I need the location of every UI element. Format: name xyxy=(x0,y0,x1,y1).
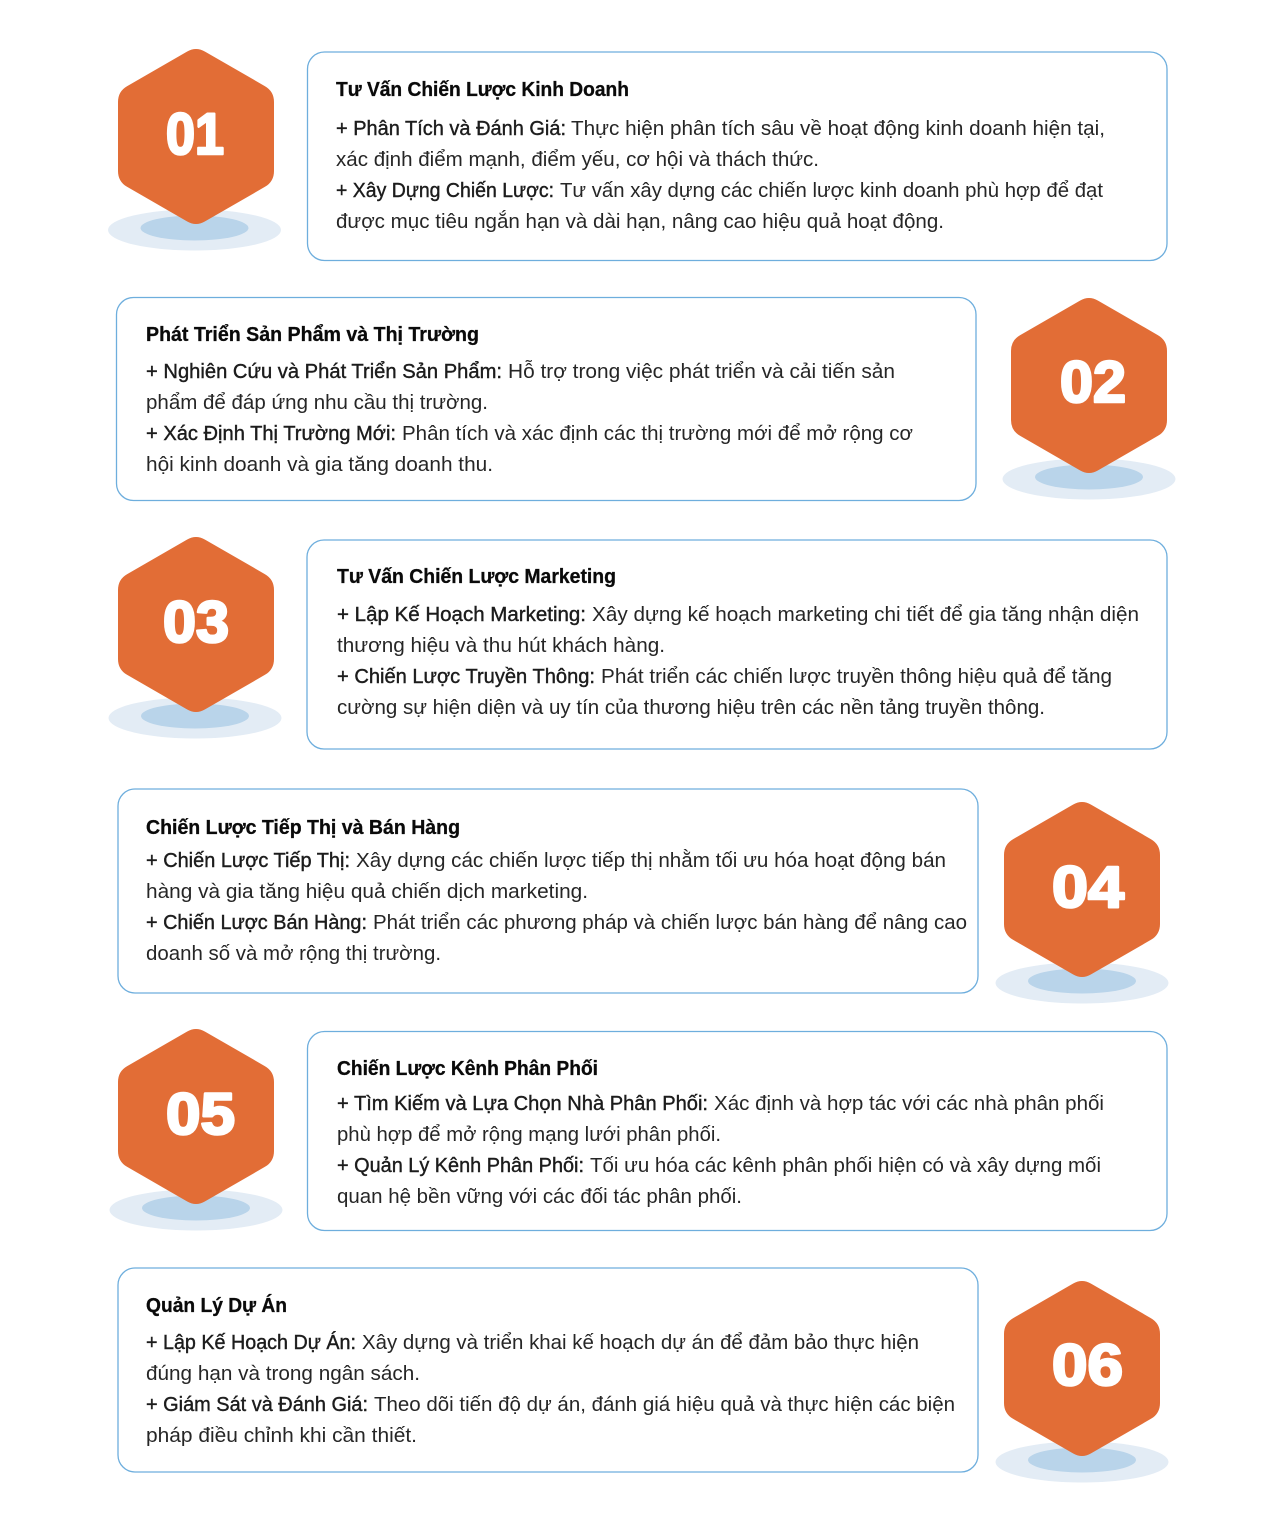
card: Chiến Lược Kênh Phân Phối: quan hệ bền vững với các đối tác phân phối. xyxy=(337,1185,742,1208)
panel: step 06 xyxy=(118,1268,1168,1482)
icon: hexagon badge 05: 05 xyxy=(166,1082,235,1147)
card: Chiến Lược Tiếp Thị và Bán Hàng: Chiến Lược Tiếp Thị và Bán Hàng xyxy=(146,817,460,839)
card: Phát Triển Sản Phẩm và Thị Trường: Phát Triển Sản Phẩm và Thị Trường xyxy=(146,324,479,346)
panel: step 03 xyxy=(108,537,1167,749)
panel: step 02 xyxy=(116,298,1176,500)
card: Quản Lý Dự Án: pháp điều chỉnh khi cần thiết. xyxy=(146,1424,417,1447)
icon: hexagon badge 03 xyxy=(108,537,282,738)
card: Chiến Lược Kênh Phân Phối: + Quản Lý Kênh Phân Phối: xyxy=(337,1154,584,1177)
icon: hexagon badge 04: 04 xyxy=(1052,855,1124,920)
card: Tư Vấn Chiến Lược Marketing: Phát triển các chiến lược truyền thông hiệu quả để tăng xyxy=(601,665,1112,688)
card: Quản Lý Dự Án: Xây dựng và triển khai kế hoạch dự án để đảm bảo thực hiện xyxy=(362,1331,919,1354)
card: Chiến Lược Tiếp Thị và Bán Hàng: doanh số và mở rộng thị trường. xyxy=(146,942,441,965)
panel: step 04 xyxy=(118,789,1168,1004)
card: Tư Vấn Chiến Lược Kinh Doanh: + Xây Dựng Chiến Lược: xyxy=(336,179,554,202)
card: Quản Lý Dự Án xyxy=(118,1268,978,1472)
card: Quản Lý Dự Án: Theo dõi tiến độ dự án, đánh giá hiệu quả và thực hiện các biện xyxy=(374,1393,955,1416)
card: Phát Triển Sản Phẩm và Thị Trường: Phân tích và xác định các thị trường mới để mở rộng cơ xyxy=(402,422,913,445)
card: Chiến Lược Tiếp Thị và Bán Hàng: hàng và gia tăng hiệu quả chiến dịch marketing. xyxy=(146,880,588,903)
card: Tư Vấn Chiến Lược Kinh Doanh: Thực hiện phân tích sâu về hoạt động kinh doanh hiện tại, xyxy=(571,117,1105,140)
card: Tư Vấn Chiến Lược Marketing: Tư Vấn Chiến Lược Marketing xyxy=(337,566,616,588)
card: Tư Vấn Chiến Lược Kinh Doanh: xác định điểm mạnh, điểm yếu, cơ hội và thách thức. xyxy=(336,148,819,171)
card: Tư Vấn Chiến Lược Kinh Doanh: Tư Vấn Chiến Lược Kinh Doanh xyxy=(336,79,629,101)
icon: hexagon badge 06: 06 xyxy=(1052,1333,1123,1398)
panel: step 05 xyxy=(110,1029,1167,1230)
card: Phát Triển Sản Phẩm và Thị Trường: + Nghiên Cứu và Phát Triển Sản Phẩm: xyxy=(146,360,502,383)
card: Chiến Lược Kênh Phân Phối: phù hợp để mở rộng mạng lưới phân phối. xyxy=(337,1123,721,1146)
card: Phát Triển Sản Phẩm và Thị Trường: + Xác Định Thị Trường Mới: xyxy=(146,422,396,445)
card: Tư Vấn Chiến Lược Marketing: + Chiến Lược Truyền Thông: xyxy=(337,665,595,688)
card: Tư Vấn Chiến Lược Marketing: + Lập Kế Hoạch Marketing: xyxy=(337,603,586,626)
card: Phát Triển Sản Phẩm và Thị Trường: phẩm để đáp ứng nhu cầu thị trường. xyxy=(146,391,488,414)
card: Phát Triển Sản Phẩm và Thị Trường: hội kinh doanh và gia tăng doanh thu. xyxy=(146,453,493,476)
icon: hexagon badge 06 xyxy=(996,1281,1168,1482)
card: Tư Vấn Chiến Lược Kinh Doanh: được mục tiêu ngắn hạn và dài hạn, nâng cao hiệu quả hoạt động. xyxy=(336,210,944,233)
card: Chiến Lược Tiếp Thị và Bán Hàng: Xây dựng các chiến lược tiếp thị nhằm tối ưu hóa hoạt động bán xyxy=(356,849,946,872)
card: Phát Triển Sản Phẩm và Thị Trường: Hỗ trợ trong việc phát triển và cải tiến sản xyxy=(508,360,895,383)
card: Tư Vấn Chiến Lược Marketing: Xây dựng kế hoạch marketing chi tiết để gia tăng nhận diện xyxy=(592,603,1139,626)
card: Chiến Lược Kênh Phân Phối: Xác định và hợp tác với các nhà phân phối xyxy=(714,1092,1104,1115)
card: Chiến Lược Kênh Phân Phối: Chiến Lược Kênh Phân Phối xyxy=(337,1058,598,1080)
icon: hexagon badge 01 xyxy=(108,49,281,250)
card: Quản Lý Dự Án: + Giám Sát và Đánh Giá: xyxy=(146,1393,368,1416)
card: Tư Vấn Chiến Lược Marketing: cường sự hiện diện và uy tín của thương hiệu trên các nền tảng truyền thông. xyxy=(337,696,1045,719)
card: Quản Lý Dự Án: + Lập Kế Hoạch Dự Án: xyxy=(146,1331,356,1354)
card: Chiến Lược Kênh Phân Phối: + Tìm Kiếm và Lựa Chọn Nhà Phân Phối: xyxy=(337,1092,708,1115)
card: Tư Vấn Chiến Lược Kinh Doanh: + Phân Tích và Đánh Giá: xyxy=(336,117,566,140)
icon: hexagon badge 02: 02 xyxy=(1060,350,1126,415)
card: Tư Vấn Chiến Lược Kinh Doanh: Tư vấn xây dựng các chiến lược kinh doanh phù hợp để đạt xyxy=(560,179,1103,202)
icon: hexagon badge 05 xyxy=(110,1029,282,1230)
card: Quản Lý Dự Án: Quản Lý Dự Án xyxy=(146,1294,287,1317)
card: Chiến Lược Kênh Phân Phối: Tối ưu hóa các kênh phân phối hiện có và xây dựng mối xyxy=(590,1154,1101,1177)
card: Chiến Lược Tiếp Thị và Bán Hàng: Phát triển các phương pháp và chiến lược bán hàng để nâng cao xyxy=(373,911,967,934)
card: Quản Lý Dự Án: đúng hạn và trong ngân sách. xyxy=(146,1362,420,1385)
card: Tư Vấn Chiến Lược Marketing xyxy=(307,540,1167,749)
card: Tư Vấn Chiến Lược Marketing: thương hiệu và thu hút khách hàng. xyxy=(337,634,665,657)
card: Phát Triển Sản Phẩm và Thị Trường xyxy=(116,298,976,500)
icon: hexagon badge 02 xyxy=(1002,298,1176,500)
icon: hexagon badge 01: 01 xyxy=(166,102,224,167)
icon: hexagon badge 04 xyxy=(996,802,1168,1004)
card: Chiến Lược Tiếp Thị và Bán Hàng: + Chiến Lược Tiếp Thị: xyxy=(146,849,350,872)
card: Chiến Lược Tiếp Thị và Bán Hàng xyxy=(118,789,978,993)
card: Chiến Lược Kênh Phân Phối xyxy=(308,1032,1167,1230)
panel: step 01 xyxy=(108,49,1167,260)
card: Chiến Lược Tiếp Thị và Bán Hàng: + Chiến Lược Bán Hàng: xyxy=(146,911,367,934)
card: Tư Vấn Chiến Lược Kinh Doanh xyxy=(308,52,1167,260)
icon: hexagon badge 03: 03 xyxy=(163,590,229,655)
